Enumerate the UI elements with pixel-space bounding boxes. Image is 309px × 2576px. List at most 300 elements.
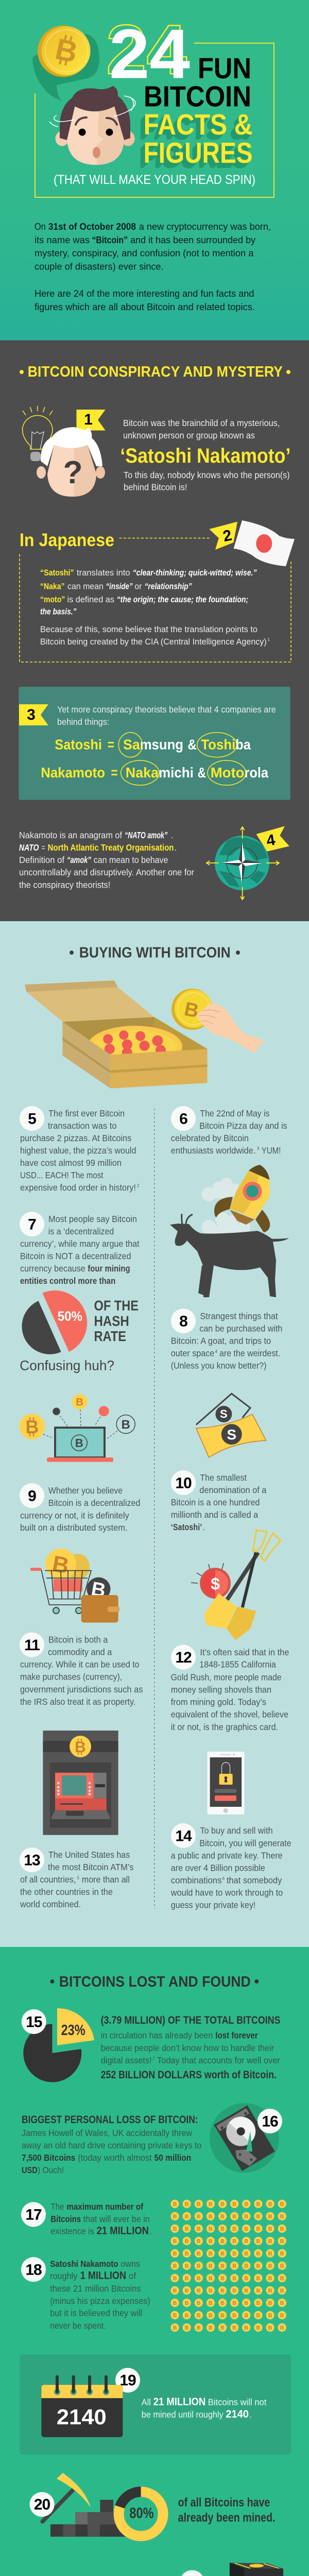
translations text: Because of this, some believe that the translation points to [40,624,258,634]
fact 4: NATO compass globe [207,826,289,900]
badge 12 [171,1645,196,1670]
illustration: locked phone [208,1752,244,1815]
fact 4: text: . [171,830,174,840]
badge 11 [20,1632,44,1657]
title word FIGURES: FIGURES [139,142,248,175]
dashed box [20,538,291,662]
fact 11 [20,1632,143,1707]
fact 16 text: ) Ouch! [38,2165,64,2175]
fact 5 text: 2 [137,1183,140,1188]
fact 10 text: denomination of a [199,1485,267,1495]
section background: hero [0,0,309,341]
illustration: bitcoin ATM [43,1731,118,1835]
fact 4: text: = [42,842,45,853]
fact 12 text: it or not, is the graphics card. [171,1722,278,1732]
icon: calendar 2140: 2140 [57,2405,107,2429]
fact 15 text: digital assets! [101,2055,152,2065]
tagline: (THAT WILL MAKE YOUR HEAD SPIN) [54,173,255,187]
title number 24: 24 [106,10,187,89]
fact 16 text: USD [22,2165,38,2175]
ribbon number 3 [19,704,48,725]
fact 14 [170,1823,291,1910]
fact 17 text: existence is [50,2226,94,2236]
fact 3 text [57,704,276,727]
badge 6 [171,1106,196,1131]
badge 7: 7 [28,1216,36,1233]
fact 12 text: from mining gold. Today’s [171,1697,266,1707]
illustration: dollar bills: S [220,1408,228,1420]
fact 18 text: roughly [50,2270,78,2281]
badge 10: 10 [175,1475,192,1492]
fact 13 text: world combined. [20,1899,81,1909]
pie chart: 50 percent hash rate [22,1291,87,1354]
ribbon number 1: 1 [84,411,92,428]
title word FACTS and: FACTS & [142,109,251,142]
fact 9 text [20,1485,140,1533]
fact 6 text: enthusiasts worldwide. [171,1145,255,1156]
equation: Satoshi: Toshi [201,737,235,753]
badge 12: 12 [175,1649,192,1666]
fact 19 text: 21 MILLION [153,2396,205,2408]
badge 9 [20,1483,44,1508]
fact 13 text: more than all [82,1874,130,1885]
illustration: anonymous person [37,427,105,500]
illustration: rocket and clouds [202,1165,270,1234]
translations text: “clear-thinking; quick-witted; wise.” [133,568,257,578]
fact 1: text: Bitcoin was the brainchild of a mysterious, [123,418,280,428]
fact 18 text: 1 MILLION [80,2269,126,2281]
title word FACTS and: FACTS & [140,112,249,145]
badge 19: 19 [119,2372,136,2389]
fact 5 text [20,1108,140,1193]
fact 17 text: 21 MILLION [97,2225,149,2237]
translations text: “Naka” [40,582,65,591]
badge 16: 16 [262,2113,278,2130]
fact 12 text: money selling shovels than [171,1685,271,1695]
title word FIGURES: FIGURES [140,140,249,173]
badge 20 [30,2492,55,2517]
translations text: 1 [268,637,270,642]
intro text: “Bitcoin” [92,234,128,245]
equation: Satoshi: Sa [123,737,140,753]
fact 4: text: NATO [19,842,39,853]
illustration: shopping cart and wallet: B [90,1578,107,1602]
ribbon number 4 [256,826,289,852]
fact 17 [21,2201,152,2237]
badge 17: 17 [25,2207,42,2224]
equation: Nakamoto: Naka [126,765,159,781]
label: of the hash rate: RATE [94,1328,126,1344]
equation: Nakamoto: rola [244,765,268,781]
fact 13 text [20,1850,134,1909]
equation: Nakamoto: & [198,765,206,781]
fact 6 text: YUM! [262,1145,281,1156]
badge 9: 9 [28,1488,36,1504]
illustration: laptop with coins: B [76,1397,83,1408]
illustration: dollar bills: S [227,1427,236,1443]
illustration: shovels and coin: $ [211,1574,220,1593]
fact 14 text [170,1825,291,1910]
badge 15 [22,2009,46,2034]
fact 4: text: Definition of [19,855,64,865]
fact 14 text: To buy and sell with [200,1825,273,1836]
fact 15 text [101,2014,281,2081]
clouds [202,1178,250,1234]
ribbon number 2 [209,521,237,550]
fact 11 text: Bitcoin is both a [48,1634,108,1645]
fact 7 text: currency because [20,1263,85,1274]
donut chart: 80 percent mined: 80% [129,2505,154,2521]
badge 18 [21,2257,46,2282]
fact 7 text [20,1214,140,1286]
fact 6 [171,1106,287,1156]
fact 3 text: behind things: [57,717,109,727]
fact 6 text [171,1108,287,1156]
illustration: stacks of money [203,2563,283,2576]
equation: Satoshi: & [187,737,197,753]
fact 11 text: commodity and a [48,1647,112,1657]
label: of the hash rate: OF THE [94,1297,139,1313]
badge 5 [20,1106,44,1131]
fact 12 text [171,1647,289,1732]
heading: buying with bitcoin: BUYING WITH BITCOIN [79,944,231,961]
translations text: the basis.” [40,607,77,617]
fact 1: text: behind Bitcoin is! [124,482,187,493]
fact 6 text: Bitcoin Pizza day and is [199,1121,287,1131]
fact 14 text: are over 4 Billion possible [171,1863,265,1873]
badge 7 [20,1212,44,1236]
badge 8: 8 [179,1313,187,1330]
illustration: dollar bills [196,1394,266,1458]
fact 20 text: of all Bitcoins have [178,2496,270,2510]
badge 16 [258,2109,282,2133]
ribbon number 2: 2 [221,527,233,545]
intro text: Here are 24 of the more interesting and fun facts and [35,288,254,299]
fact 5 text: expensive food order in history! [20,1182,136,1193]
translations text: or [134,582,142,591]
fact 19 text: 2140 [226,2409,249,2420]
yellow title frame [35,43,274,197]
illustration: laptop with coins: B [122,1418,130,1432]
fact 18 text: but it is believed they will [50,2308,142,2318]
fact 20 [30,2473,276,2537]
fact 15 text: Today that accounts for well over [157,2055,280,2065]
fact 20 text [178,2496,276,2524]
fact 16 text: away an old hard drive containing private keys to [22,2140,202,2150]
fact 4: text: can mean to behave [94,855,168,865]
fact 8 text: can be purchased with [199,1323,282,1333]
heading: In Japanese: In Japanese [20,530,114,550]
translations text: can mean [67,582,104,591]
icon: bitcoin coin [38,26,91,77]
fact 9 text: currency or not, it is definitely [20,1510,129,1520]
fact 2: In Japanese panel [20,520,295,662]
fact 16 text: 7,500 Bitcoins [22,2153,75,2163]
intro text: and it has been surrounded by [130,234,256,245]
illustration: spinning head [49,86,135,167]
fact 16 text: (today worth almost [78,2153,152,2163]
icon: hard drive [210,2103,279,2173]
ribbon number 1 [76,410,106,431]
fact 4: text: “amok” [67,855,91,865]
intro text [35,221,271,312]
fact 5 text: USD... EACH! The most [20,1170,104,1180]
title number 24: 24 [109,14,190,93]
fact 11 text: currency. While it can be used to [20,1659,140,1669]
ribbon number 4: 4 [265,832,277,850]
fact 19 text: Bitcoins will not [208,2397,267,2407]
fact 10 text: Bitcoin is a one hundred [171,1497,260,1507]
illustration: pizza box [25,980,208,1088]
fact 15 text: because people don’t know how to handle their [101,2043,274,2053]
fact 17 text: . [149,2226,152,2236]
illustration: shopping cart and wallet: B [50,1551,71,1579]
equation: Nakamoto [41,760,268,785]
fact 13 text: the most Bitcoin ATM’s [48,1862,134,1872]
title word FACTS and: FACTS & [144,108,253,141]
title word FACTS and: FACTS & [139,113,248,146]
fact 18 text: owns [121,2259,140,2269]
fact 10 text: . [202,1522,205,1532]
badge 20: 20 [34,2496,50,2513]
fact 14 text: combinations [171,1875,222,1885]
fact 14 text: would have to work through to [170,1888,283,1898]
fact 7 text: Bitcoin is NOT a decentralized [20,1251,131,1261]
translations text: “Satoshi” [40,568,74,578]
illustration: laptop with coins: B [75,1436,83,1450]
fact 16 text: James Howell of Wales, UK accidentally threw [22,2128,192,2138]
dotted column divider [154,1109,155,1909]
fact 18 text: of [129,2270,136,2281]
fact 18 text: these 21 million Bitcoins [50,2283,141,2294]
fact 3 text: Yet more conspiracy theorists believe that 4 companies are [57,704,276,715]
fact 19 text: be mined until roughly [142,2410,224,2420]
fact 8 text: Strangest things that [200,1311,278,1321]
fact 17 text: that will ever be in [83,2214,150,2224]
heading: bitcoin conspiracy and mystery: BITCOIN CONSPIRACY AND MYSTERY [28,364,283,380]
title word FIGURES: FIGURES [141,139,250,172]
title word FIGURES: FIGURES [142,138,251,171]
section background: conspiracy [0,340,309,921]
fact 7 text: four mining [88,1263,130,1274]
title word BITCOIN: BITCOIN [144,80,251,113]
translations text: “inside” [106,582,133,591]
fact 12 text: 1848-1855 California [199,1659,276,1669]
illustration: goat [170,1214,289,1297]
fact 9 text: Whether you believe [48,1485,123,1496]
fact 8 text: (Unless you know better?) [171,1360,266,1370]
intro text: On [35,221,46,232]
fact 16 text: BIGGEST PERSONAL LOSS OF BITCOIN: [22,2114,198,2126]
equation: Satoshi: ba [235,737,251,753]
fact 10 text: millionth and is called a [171,1510,259,1520]
equation: Satoshi [55,733,251,757]
fact 15 [22,2008,281,2082]
fact 16 [22,2103,282,2175]
translations text: Bitcoin being created by the CIA (Central Intelligence Agency) [40,637,267,647]
fact 9 text: built on a distributed system. [20,1522,128,1533]
fact 10 text: ‘Satoshi’ [171,1522,202,1532]
fact 17 text: The [50,2201,64,2212]
badge 13: 13 [24,1852,40,1869]
icon: compass star [221,842,263,884]
fact 8 text: Bitcoin: A goat, and trips to [171,1335,271,1346]
fact 21 [26,2563,283,2576]
fact 19 text [142,2396,267,2420]
panel: fact 19 [20,2354,291,2454]
fact 5 text: purchase 2 pizzas. At Bitcoins [20,1133,132,1143]
badge 14 [171,1823,196,1848]
fact 1: illustration [22,406,106,500]
section background: lost and found [0,1947,309,2576]
fact 16 text [22,2114,202,2175]
equation: Nakamoto: Moto [211,765,244,781]
translations text: translates into [77,568,130,578]
fact 5 [20,1106,140,1193]
fact 4: text: the conspiracy theorists! [19,879,110,890]
fact 6 text: celebrated by Bitcoin [171,1133,249,1143]
donut chart: 80 percent mined [119,2492,163,2536]
title word FUN: FUN [198,52,251,85]
fact 18 text: Satoshi Nakamoto [50,2259,118,2269]
fact 4: text: North Atlantic Treaty Organisation [48,842,174,853]
illustration: anonymous person: ? [63,455,82,490]
illustration: bitcoin ATM: B [75,1739,86,1756]
equation: Satoshi: Satoshi [55,737,102,753]
fact 4: text: . [174,842,177,853]
fact 5 text: The first ever Bitcoin [48,1108,125,1118]
equation: Nakamoto: Nakamoto [41,765,105,781]
fact 14 text: guess your private key! [171,1900,255,1910]
fact 3: companies panel [19,687,290,800]
fact 12 [171,1645,289,1732]
fact 18 text [50,2259,150,2331]
speech bubble [32,34,99,101]
fact 19 text: All [142,2397,151,2407]
fact 6 text: 3 [257,1146,260,1151]
badge 13 [20,1848,44,1872]
fact 5 text: highest value, the pizza’s would [20,1145,136,1156]
fact 7 [20,1212,140,1373]
intro text: couple of disasters) ever since. [35,261,164,272]
fact 13 text: The United States has [48,1850,130,1860]
title word FIGURES: FIGURES [144,137,253,170]
illustration: pickaxe and blocks [42,2473,126,2537]
fact 8 text [171,1311,282,1370]
equation: Nakamoto: = [111,765,117,781]
fact 20 text: already been mined. [178,2511,276,2524]
fact 12 text: Gold Rush, more people made [171,1672,281,1682]
pizza [88,1026,182,1067]
fact 17 text: Bitcoins [50,2214,81,2224]
translations text: “moto” [40,595,65,604]
fact 8 text: 4 [215,1349,217,1354]
fact 8 text: are the weirdest. [219,1348,280,1358]
fact 4: text: uncontrollably and disruptively. Another one for [19,867,194,877]
badge 21 [180,2570,204,2576]
fact 13 text: 5 [77,1875,79,1880]
fact 10 [171,1470,267,1532]
illustration: hand holding coin [171,989,264,1053]
fact 6 text: The 22nd of May is [200,1108,270,1118]
badge 17 [21,2202,46,2227]
pie chart: 23 percent lost: 23% [61,2022,85,2039]
callout: Satoshi Nakamoto: ‘Satoshi Nakamoto’ [120,445,290,467]
icon: japanese flag [234,520,295,566]
fact 15 text: in circulation has already been [101,2030,213,2041]
ribbon number 3: 3 [27,706,35,723]
fact 7 text: Most people say Bitcoin [48,1214,137,1224]
equation: Satoshi: msung [140,737,183,753]
fact 5 text: have cost almost 99 million [20,1158,122,1168]
fact 1: text: unknown person or group known as [123,430,255,440]
illustration: hand holding coin: B [182,998,201,1022]
badge 11: 11 [24,1637,40,1654]
fact 11 text: government jurisdictions such as [20,1684,143,1694]
fact 4: text: Nakamoto is an anagram of [19,830,122,840]
fact 7 text: is a ‘decentralized [48,1226,114,1236]
illustration: shovels and coin [191,1530,281,1640]
fact 18 [21,2257,150,2331]
icon: calendar 2140 [41,2375,123,2437]
label: of the hash rate [94,1297,139,1344]
fact 13 text: of all countries, [20,1874,76,1885]
fact 11 text [20,1634,143,1707]
fact 9 text: Bitcoin is a decentralized [48,1498,140,1508]
fact 13 text: the other countries in the [20,1887,113,1897]
translations text: “the origin; the cause; the foundation; [117,595,248,604]
fact 18 text: never be spent. [50,2320,106,2331]
badge 5: 5 [28,1110,36,1127]
fact 8 text: outer space [171,1348,214,1358]
illustration: laptop with coins: B [25,1416,39,1437]
fact 17 text: maximum number of [66,2201,143,2212]
fact 12 text: equivalent of the shovel, believe [171,1709,288,1720]
badge 6: 6 [179,1110,187,1127]
fact 14 text: a public and private key. There [171,1851,282,1861]
heading: bitcoins lost and found: BITCOINS LOST AND FOUND [59,1974,251,1990]
fact 15 text: (3.79 MILLION) OF THE TOTAL BITCOINS [101,2014,281,2026]
confusing huh: Confusing huh? [20,1358,114,1373]
translations text: is defined as [67,595,114,604]
intro text: figures which are all about Bitcoin and related topics. [35,301,255,312]
badge 15: 15 [26,2013,42,2030]
intro text: 31st of October 2008 [48,221,136,232]
fact 17 text [50,2201,152,2237]
intro text: its name was [35,234,90,245]
fact 11 text: the IRS also treat it as property. [20,1697,135,1707]
fact 13 [20,1848,134,1909]
badge 19 [115,2368,140,2393]
badge 18: 18 [25,2261,42,2278]
fact 4: text: “NATO amok” [125,830,167,840]
fact 1: text: To this day, nobody knows who the person(s) [124,470,290,480]
fact 8 [171,1309,282,1370]
rocket [214,1165,270,1232]
intro text: a new cryptocurrency was born, [139,221,271,232]
title word FACTS and: FACTS & [141,111,250,144]
hero illustration and title [32,10,274,197]
fact 14 text: 6 [222,1876,225,1881]
fact 15 text: 252 BILLION DOLLARS worth of Bitcoin. [101,2069,277,2081]
fact 7 text: entities control more than [20,1276,115,1286]
illustration: laptop with coins [19,1394,135,1462]
fact 15 text: lost forever [215,2030,258,2041]
badge 8 [171,1309,196,1333]
fact 11 text: make purchases (currency), [20,1672,122,1682]
fact 10 text [171,1472,267,1532]
fact 9 [20,1483,140,1533]
